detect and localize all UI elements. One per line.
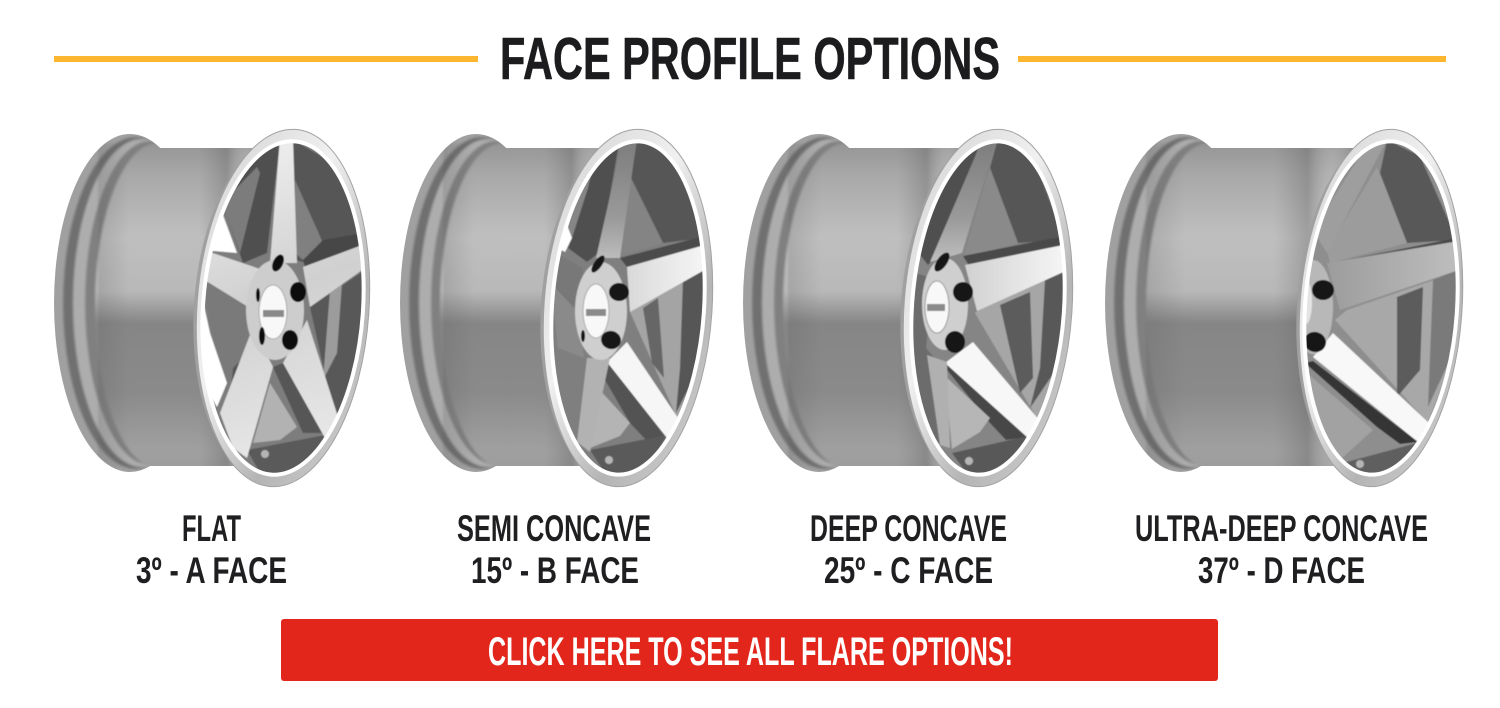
spokes (1305, 140, 1459, 444)
rim bead (1285, 132, 1463, 483)
rim lip (892, 124, 1084, 492)
rim inner highlight (541, 136, 715, 480)
barrel (1105, 134, 1353, 472)
label: deep concave: 25º - C FACE (824, 550, 993, 591)
wheel: ultra-deep concave D face (1091, 124, 1474, 492)
spokes (927, 138, 1068, 448)
wheel: semi concave B face (388, 124, 724, 492)
hub (922, 258, 968, 350)
label: ultra-deep concave: 37º - D FACE (1198, 550, 1365, 591)
rim bead (182, 131, 370, 484)
right header rule (1018, 56, 1446, 62)
rim lip (532, 124, 724, 492)
label: flat (136, 508, 287, 591)
label: flat: 3º - A FACE (136, 550, 287, 591)
wheel: deep concave C face (738, 124, 1084, 492)
title: FACE PROFILE OPTIONS (500, 26, 1000, 92)
rim inner highlight (192, 136, 374, 480)
label: semi concave: 15º - B FACE (471, 550, 639, 591)
wheel face (1306, 143, 1456, 473)
lug holes (581, 254, 629, 351)
label: semi concave: SEMI CONCAVE (457, 508, 651, 549)
rim inner highlight (901, 136, 1075, 480)
barrel (54, 134, 252, 472)
label: ultra-deep concave (1135, 508, 1428, 591)
rim lip (1288, 124, 1474, 492)
barrel (400, 134, 598, 472)
button: see all flare options (281, 619, 1218, 681)
label: deep concave (810, 508, 1007, 591)
lug holes (1306, 280, 1334, 353)
barrel (743, 134, 958, 472)
rim inner highlight (1294, 136, 1468, 480)
wheel face (913, 143, 1063, 473)
label: deep concave: DEEP CONCAVE (810, 508, 1007, 549)
left header rule (54, 56, 478, 62)
hub (246, 260, 304, 360)
label: flat: FLAT (182, 508, 241, 549)
spokes (198, 138, 365, 458)
rim bead (529, 131, 713, 484)
spokes (556, 163, 702, 452)
rim bead (889, 131, 1073, 484)
lug holes (932, 250, 973, 353)
lug holes (256, 253, 306, 350)
label: semi concave (457, 508, 651, 591)
hub (1306, 260, 1334, 354)
wheel face (553, 143, 703, 473)
button: see all flare options: CLICK HERE TO SEE ALL FLARE OPTIONS! (488, 630, 1013, 674)
wheel: flat A face (43, 123, 381, 493)
hub (575, 262, 627, 360)
wheel face (204, 143, 362, 473)
rim lip (185, 123, 381, 493)
